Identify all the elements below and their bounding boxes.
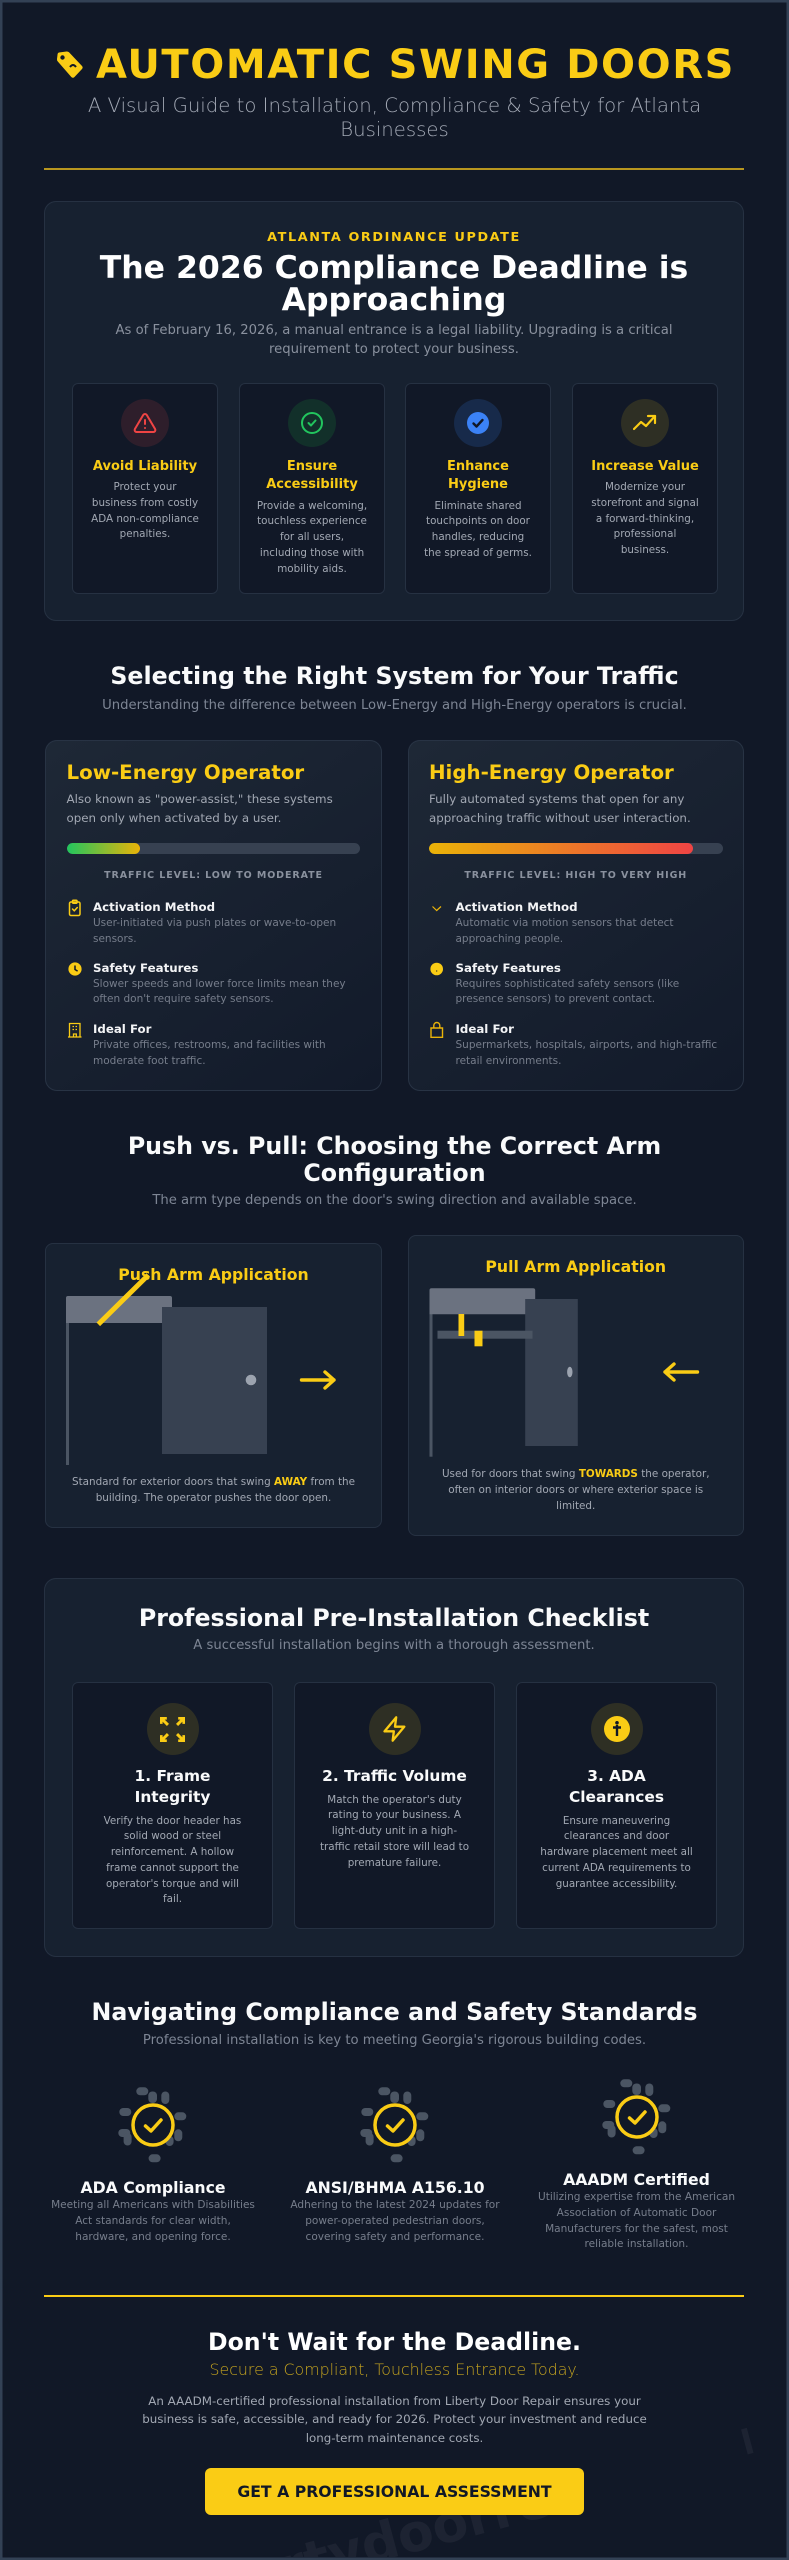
- description: Also known as "power-assist," these systems: [66, 792, 333, 806]
- card text: [424, 500, 532, 559]
- description: approaching traffic without user interaction.: [429, 811, 691, 825]
- diagram: push arm door: [66, 1273, 336, 1465]
- feature text: presence sensors) to prevent contact.: [456, 993, 655, 1005]
- card text: handles, reducing: [432, 531, 524, 543]
- standard: ada compliance: [40, 2083, 266, 2248]
- card text: touchpoints on door: [426, 515, 530, 527]
- feature text: [93, 978, 346, 1005]
- feature text: Requires sophisticated safety sensors (like: [456, 978, 679, 990]
- cta text: An AAADM-certified professional installation from Liberty Door Repair ensures your: [148, 2394, 641, 2408]
- caption: building. The operator pushes the door open.: [96, 1492, 331, 1504]
- card text: mobility aids.: [277, 563, 347, 575]
- icon: accessibility circle: [590, 1703, 642, 1755]
- cta text: [0, 2392, 789, 2447]
- feature text: [456, 1039, 717, 1067]
- intro text: requirement to protect your business.: [269, 342, 519, 357]
- icon: shopping bag: [430, 1022, 444, 1038]
- standard text: Adhering to the latest 2024 updates for: [290, 2199, 500, 2211]
- heading: [100, 250, 688, 318]
- feature title: Ideal For: [456, 1022, 514, 1036]
- card text: Eliminate shared: [434, 500, 522, 512]
- feature: safety: [430, 961, 679, 1005]
- card title: Hygiene: [448, 477, 508, 492]
- feature title: Activation Method: [456, 900, 578, 914]
- feature text: [93, 917, 336, 945]
- card text: premature failure.: [348, 1857, 441, 1869]
- card title: Integrity: [135, 1788, 210, 1806]
- section heading: selecting system: [102, 662, 687, 713]
- panel: pre-installation checklist: [44, 1578, 744, 1957]
- card text: reinforcement. A hollow: [111, 1846, 234, 1858]
- card text: light-duty unit in a high-: [332, 1825, 457, 1837]
- title: AUTOMATIC SWING DOORS: [96, 42, 735, 88]
- traffic bar: [429, 843, 722, 854]
- standard title: ANSI/BHMA A156.10: [305, 2178, 485, 2197]
- feature text: often don't require safety sensors.: [93, 993, 274, 1005]
- icon: badge check: [355, 2083, 435, 2173]
- icon: blue badge: [454, 399, 502, 447]
- card text: Match the operator's duty: [327, 1794, 462, 1806]
- heading: The 2026 Compliance Deadline is: [100, 250, 688, 286]
- feature text: Slower speeds and lower force limits mean they: [93, 978, 346, 990]
- feature text: [456, 917, 674, 945]
- title: Low-Energy Operator: [66, 761, 304, 784]
- heading: Professional Pre-Installation Checklist: [139, 1604, 649, 1632]
- card text: [257, 500, 367, 575]
- cta heading: Don't Wait for the Deadline.: [208, 2328, 581, 2356]
- title: Pull Arm Application: [485, 1257, 666, 1276]
- card text: Verify the door header has: [104, 1814, 241, 1826]
- section heading: push vs pull: [128, 1132, 661, 1208]
- caption: Used for doors that swing TOWARDS the operator,: [442, 1468, 710, 1480]
- card: enhance hygiene: [405, 383, 551, 594]
- panel: low-energy operator: [45, 740, 382, 1091]
- icon: price tag: [57, 52, 83, 78]
- card text: touchless experience: [257, 515, 367, 527]
- feature text: User-initiated via push plates or wave-to-open: [93, 917, 336, 929]
- panel: pull arm: [408, 1235, 744, 1536]
- card: avoid liability: [72, 383, 218, 594]
- subheading: A successful installation begins with a thorough assessment.: [193, 1638, 595, 1653]
- card title: Accessibility: [266, 477, 358, 492]
- icon: badge check: [596, 2075, 676, 2165]
- card text: penalties.: [120, 528, 170, 540]
- heading: Selecting the Right System for Your Traffic: [110, 662, 679, 690]
- feature text: approaching people.: [456, 933, 563, 945]
- heading: Push vs. Pull: Choosing the Correct Arm: [128, 1132, 661, 1160]
- card: ensure accessibility: [239, 383, 385, 594]
- feature text: [456, 978, 679, 1005]
- icon: warning: [121, 399, 169, 447]
- diagram: pull arm door: [430, 1288, 700, 1457]
- card: frame integrity: [72, 1682, 273, 1929]
- caption: Standard for exterior doors that swing AWAY from the: [72, 1476, 355, 1488]
- standard text: [40, 2198, 266, 2245]
- feature: activation: [432, 900, 674, 945]
- section heading: compliance standards: [0, 1998, 789, 2052]
- icon: trending up: [621, 399, 669, 447]
- card text: including those with: [260, 547, 364, 559]
- card title: [266, 458, 358, 492]
- cta subheading: Secure a Compliant, Touchless Entrance Today.: [209, 2360, 580, 2379]
- feature title: Safety Features: [456, 961, 561, 975]
- subheading: The arm type depends on the door's swing direction and available space.: [152, 1193, 637, 1208]
- standard text: [524, 2190, 750, 2253]
- icon: clock: [68, 962, 82, 976]
- card title: Increase Value: [591, 458, 699, 474]
- intro text: As of February 16, 2026, a manual entrance is a legal liability. Upgrading is a critical: [116, 323, 672, 338]
- standard text: Meeting all Americans with Disabilities: [51, 2199, 255, 2211]
- card title: [135, 1767, 210, 1806]
- traffic bar: [66, 843, 360, 854]
- card text: Modernize your: [605, 481, 685, 493]
- heading: Approaching: [282, 282, 506, 318]
- subtitle: A Visual Guide to Installation, Compliance & Safety for Atlanta: [88, 94, 701, 117]
- caption: limited.: [556, 1500, 595, 1512]
- icon: lightning bolt: [368, 1703, 420, 1755]
- cta button: [205, 2468, 584, 2515]
- feature text: sensors.: [93, 933, 137, 945]
- card text: [294, 1792, 495, 1871]
- card text: guarantee accessibility.: [556, 1878, 677, 1890]
- cta button: GET A PROFESSIONAL ASSESSMENT: [237, 2482, 552, 2501]
- subheading: Professional installation is key to meeting Georgia's rigorous building codes.: [143, 2033, 646, 2048]
- feature text: [93, 1039, 326, 1067]
- card: ada clearances: [516, 1682, 717, 1929]
- standard text: [282, 2198, 508, 2245]
- feature: safety: [68, 961, 346, 1005]
- card text: professional: [614, 528, 676, 540]
- feature text: moderate foot traffic.: [93, 1055, 206, 1067]
- eyebrow: ATLANTA ORDINANCE UPDATE: [267, 230, 521, 245]
- standard: aaadm certified: [524, 2075, 750, 2255]
- cta text: business is safe, accessible, and ready for 2026. Protect your investment and reduce: [142, 2412, 647, 2426]
- card text: Ensure maneuvering: [563, 1814, 670, 1826]
- card text: business.: [621, 544, 669, 556]
- gold divider: [44, 168, 744, 170]
- feature text: Supermarkets, hospitals, airports, and high-traffic: [456, 1039, 717, 1051]
- subtitle: [88, 94, 701, 141]
- card title: Ensure: [287, 458, 337, 474]
- card title: Clearances: [569, 1788, 664, 1806]
- card text: business from costly: [92, 497, 198, 509]
- caption: [72, 1476, 355, 1504]
- standard text: Act standards for clear width,: [75, 2215, 231, 2227]
- description: [429, 792, 691, 825]
- feature: ideal for: [430, 1022, 717, 1067]
- card: increase value: [572, 383, 718, 594]
- card text: [516, 1814, 717, 1892]
- card text: for all users,: [280, 531, 344, 543]
- card title: [447, 458, 509, 492]
- intro text: [116, 323, 672, 357]
- card text: rating to your business. A: [328, 1809, 461, 1821]
- card text: ADA non-compliance: [91, 513, 199, 525]
- gold divider: [44, 2295, 744, 2297]
- watermark: l: [737, 2422, 759, 2464]
- card text: [91, 481, 199, 540]
- card text: [591, 481, 699, 556]
- card text: hardware placement meet all: [540, 1846, 693, 1858]
- subheading: Understanding the difference between Low-Energy and High-Energy operators is crucial.: [102, 698, 687, 713]
- panel: push arm: [45, 1243, 382, 1528]
- card title: Enhance: [447, 458, 509, 474]
- standard text: hardware, and opening force.: [75, 2231, 231, 2243]
- cta text: long-term maintenance costs.: [306, 2430, 483, 2444]
- card text: Provide a welcoming,: [257, 500, 367, 512]
- card text: a forward-thinking,: [596, 513, 694, 525]
- description: [66, 792, 333, 825]
- traffic label: TRAFFIC LEVEL: LOW TO MODERATE: [104, 870, 323, 881]
- card title: Avoid Liability: [93, 458, 197, 474]
- feature title: Ideal For: [93, 1022, 151, 1036]
- card title: [516, 1766, 717, 1808]
- call to action: [0, 2295, 789, 2520]
- feature text: Automatic via motion sensors that detect: [456, 917, 674, 929]
- feature title: Activation Method: [93, 900, 215, 914]
- standard text: Manufacturers for the safest, most: [545, 2223, 728, 2235]
- icon: building: [68, 1022, 82, 1038]
- card text: fail.: [163, 1893, 182, 1905]
- card text: the spread of germs.: [424, 547, 532, 559]
- card title: 1. Frame: [135, 1767, 210, 1785]
- card text: operator's torque and will: [106, 1878, 239, 1890]
- traffic label: TRAFFIC LEVEL: HIGH TO VERY HIGH: [464, 870, 687, 881]
- feature text: retail environments.: [456, 1055, 561, 1067]
- card text: current ADA requirements to: [542, 1862, 691, 1874]
- description: open only when activated by a user.: [66, 811, 281, 825]
- heading: Configuration: [303, 1159, 486, 1187]
- icon: check circle: [288, 399, 336, 447]
- card text: storefront and signal: [591, 497, 699, 509]
- standard text: covering safety and performance.: [306, 2231, 484, 2243]
- standard text: Utilizing expertise from the American: [538, 2191, 735, 2203]
- card text: frame cannot support the: [106, 1862, 239, 1874]
- header: [44, 42, 744, 170]
- description: Fully automated systems that open for any: [429, 792, 684, 806]
- card: traffic volume: [294, 1682, 495, 1929]
- caption: often on interior doors or where exterior space is: [448, 1484, 703, 1496]
- standard title: ADA Compliance: [80, 2178, 226, 2197]
- feature text: Private offices, restrooms, and facilities with: [93, 1039, 326, 1051]
- panel: high-energy operator: [408, 740, 744, 1091]
- card text: [72, 1814, 273, 1908]
- watermark: [168, 2422, 759, 2557]
- standard: ansi bhma: [282, 2083, 508, 2248]
- heading: Navigating Compliance and Safety Standards: [92, 1998, 697, 2026]
- card text: clearances and door: [564, 1830, 669, 1842]
- card title: 2. Traffic Volume: [322, 1767, 467, 1785]
- feature title: Safety Features: [93, 961, 198, 975]
- title: High-Energy Operator: [429, 761, 674, 784]
- card text: solid wood or steel: [124, 1830, 221, 1842]
- caption: [442, 1468, 710, 1512]
- card text: Protect your: [113, 481, 177, 493]
- icon: chevron: [432, 906, 442, 912]
- feature: ideal for: [68, 1022, 326, 1067]
- icon: clipboard: [68, 900, 81, 916]
- icon: dot circle: [430, 962, 443, 976]
- panel: compliance deadline: [44, 201, 744, 621]
- subtitle: Businesses: [340, 118, 449, 141]
- icon: expand arrows: [146, 1703, 198, 1755]
- standard text: power-operated pedestrian doors,: [305, 2215, 485, 2227]
- heading: [128, 1132, 661, 1187]
- card text: traffic retail store will lead to: [320, 1841, 469, 1853]
- icon: badge check: [113, 2083, 193, 2173]
- card title: 3. ADA: [587, 1767, 646, 1785]
- feature: activation: [68, 900, 336, 945]
- standard text: reliable installation.: [584, 2238, 688, 2250]
- standard text: Association of Automatic Door: [557, 2207, 716, 2219]
- standard title: AAADM Certified: [563, 2170, 710, 2189]
- title: Push Arm Application: [118, 1265, 309, 1284]
